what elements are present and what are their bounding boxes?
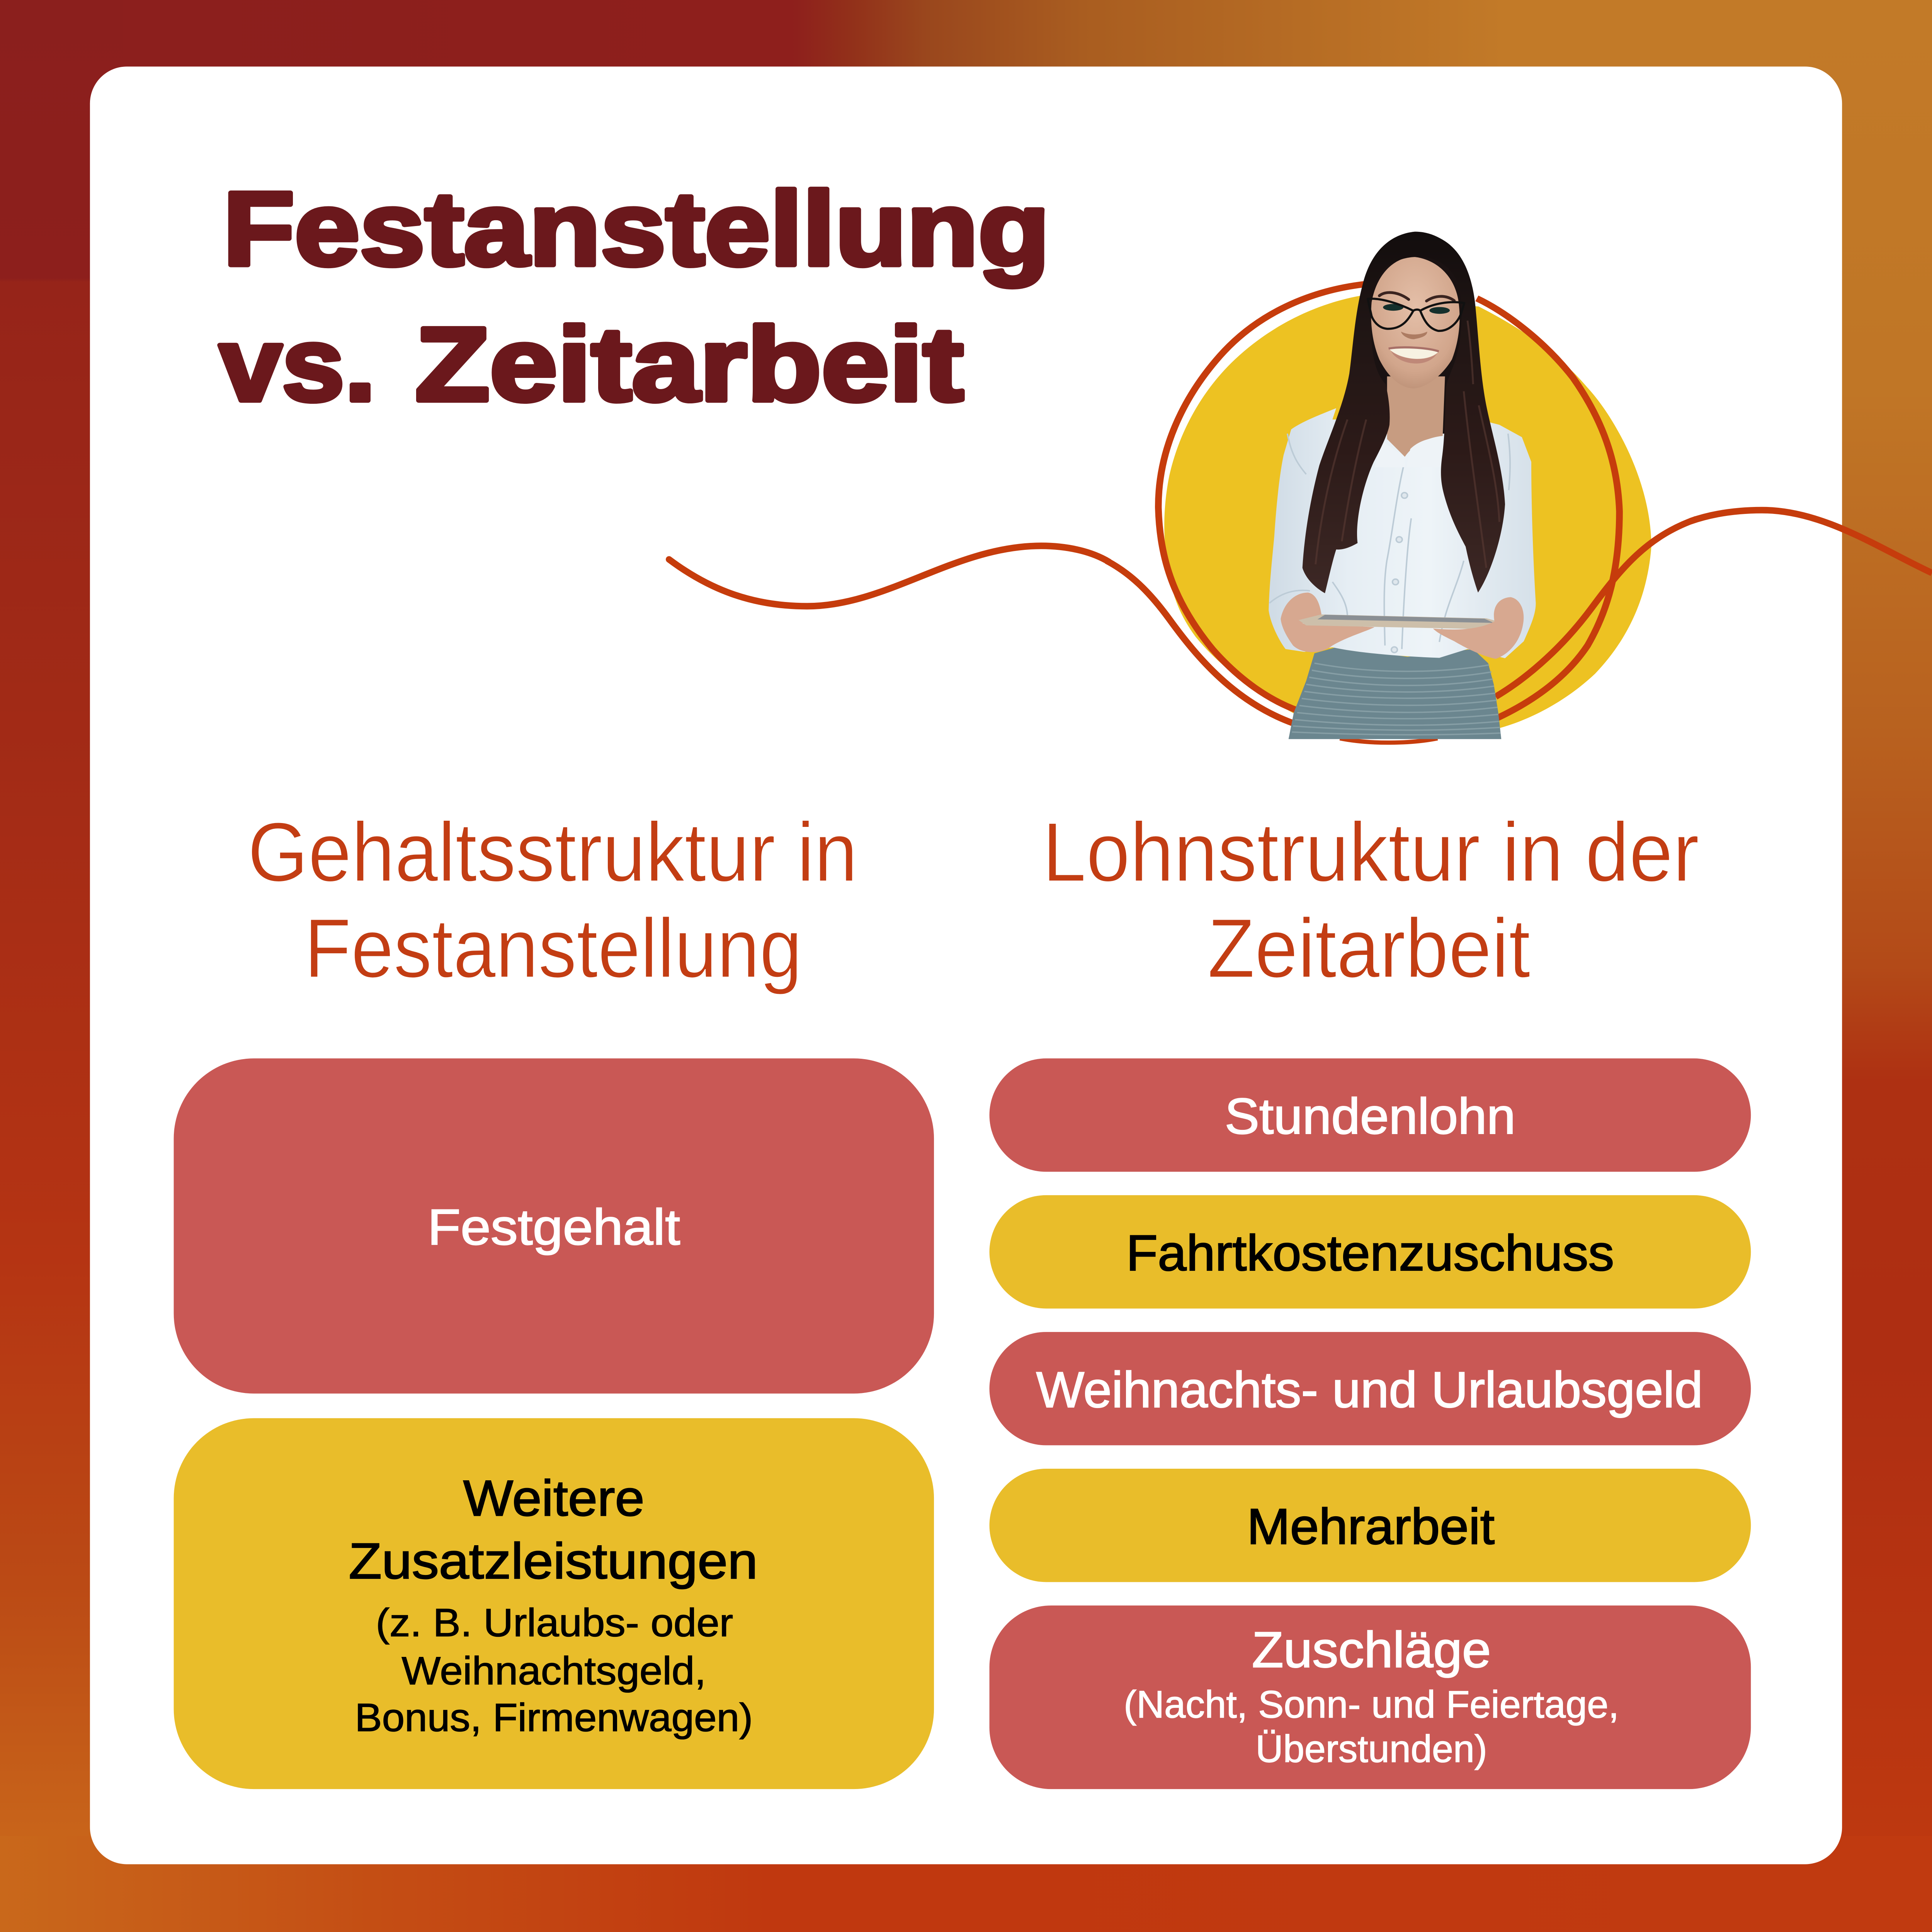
eyebrows [1379, 293, 1454, 301]
pill: Fahrtkostenzuschuss [990, 1195, 1751, 1308]
woman: hair behind head [1362, 250, 1468, 434]
title: Festanstellung [223, 171, 1050, 288]
pill: Weihnachts- und Urlaubsgeld [990, 1332, 1751, 1445]
pill: Fahrtkostenzuschuss: Fahrtkostenzuschuss [1126, 1225, 1614, 1281]
mouth [1389, 347, 1439, 364]
panel: Weitere Zusatzleistungen [174, 1418, 934, 1789]
decorative wave: right segment [1690, 510, 1932, 573]
woman: skirt [1289, 647, 1501, 739]
heading: Gehaltsstruktur: Gehaltsstruktur in [248, 805, 857, 899]
eyes [1383, 304, 1450, 314]
hand-drawn circle outline [1158, 284, 1619, 718]
woman: right hand [1433, 597, 1524, 659]
woman: shirt folds and buttons [1269, 434, 1510, 653]
pill: Weihnachts- und Urlaubsgeld: Weihnachts- und Urlaubsgeld [1036, 1362, 1703, 1418]
title: Zeitarbeit [415, 306, 964, 423]
pill: Zuschläge: (Nacht, Sonn- und Feiertage, [1124, 1683, 1619, 1726]
heading: Gehaltsstruktur: Festanstellung [304, 901, 802, 995]
pill: Zuschläge [990, 1605, 1751, 1789]
panel: Weitere Zusatzleistungen: Zusatzleistungen [349, 1533, 758, 1589]
decorative wave: left segment [669, 546, 1109, 606]
pill: Stundenlohn [990, 1058, 1751, 1172]
heading: Gehaltsstruktur [248, 805, 857, 995]
woman: face, neck and collar [1371, 257, 1459, 467]
panel: Weitere Zusatzleistungen: Weitere [463, 1470, 645, 1526]
woman: long hair, hands and tablet [1281, 231, 1524, 659]
pill: Zuschläge: Überstunden) [1255, 1728, 1487, 1770]
neck [1387, 376, 1445, 457]
glasses [1368, 299, 1464, 331]
collar [1375, 437, 1444, 467]
pill: Mehrarbeit: Mehrarbeit [1247, 1498, 1495, 1555]
circle arc below skirt [1340, 738, 1437, 743]
nose [1401, 332, 1427, 339]
heading: Lohnstruktur [1043, 805, 1699, 995]
hair [1303, 231, 1505, 593]
panel: Festgehalt: Festgehalt [428, 1199, 680, 1255]
panel: Festgehalt [174, 1058, 934, 1394]
woman: shirt [1269, 408, 1536, 658]
pill: Stundenlohn: Stundenlohn [1225, 1088, 1515, 1145]
woman: tablet [1299, 614, 1510, 629]
face [1371, 257, 1459, 388]
woman: facial features [1368, 293, 1464, 364]
portrait background and body [1107, 250, 1696, 743]
pill: Zuschläge: Zuschläge [1252, 1621, 1491, 1678]
panel: Weitere Zusatzleistungen: (z. B. Urlaubs- oder [376, 1601, 733, 1645]
panel: Weitere Zusatzleistungen: Weihnachtsgeld, [402, 1649, 706, 1693]
heading: Lohnstruktur: Lohnstruktur in der [1043, 805, 1699, 899]
title [219, 171, 1050, 423]
icon: yellow blob [1164, 296, 1651, 730]
curved wave line through portrait [1107, 519, 1696, 723]
hair highlights [1316, 321, 1499, 568]
title: vs. [219, 306, 376, 423]
heading: Lohnstruktur: Zeitarbeit [1208, 901, 1530, 995]
woman: left hand [1281, 592, 1374, 652]
panel: Weitere Zusatzleistungen: Bonus, Firmenwagen) [355, 1696, 753, 1740]
pill: Mehrarbeit [990, 1469, 1751, 1582]
